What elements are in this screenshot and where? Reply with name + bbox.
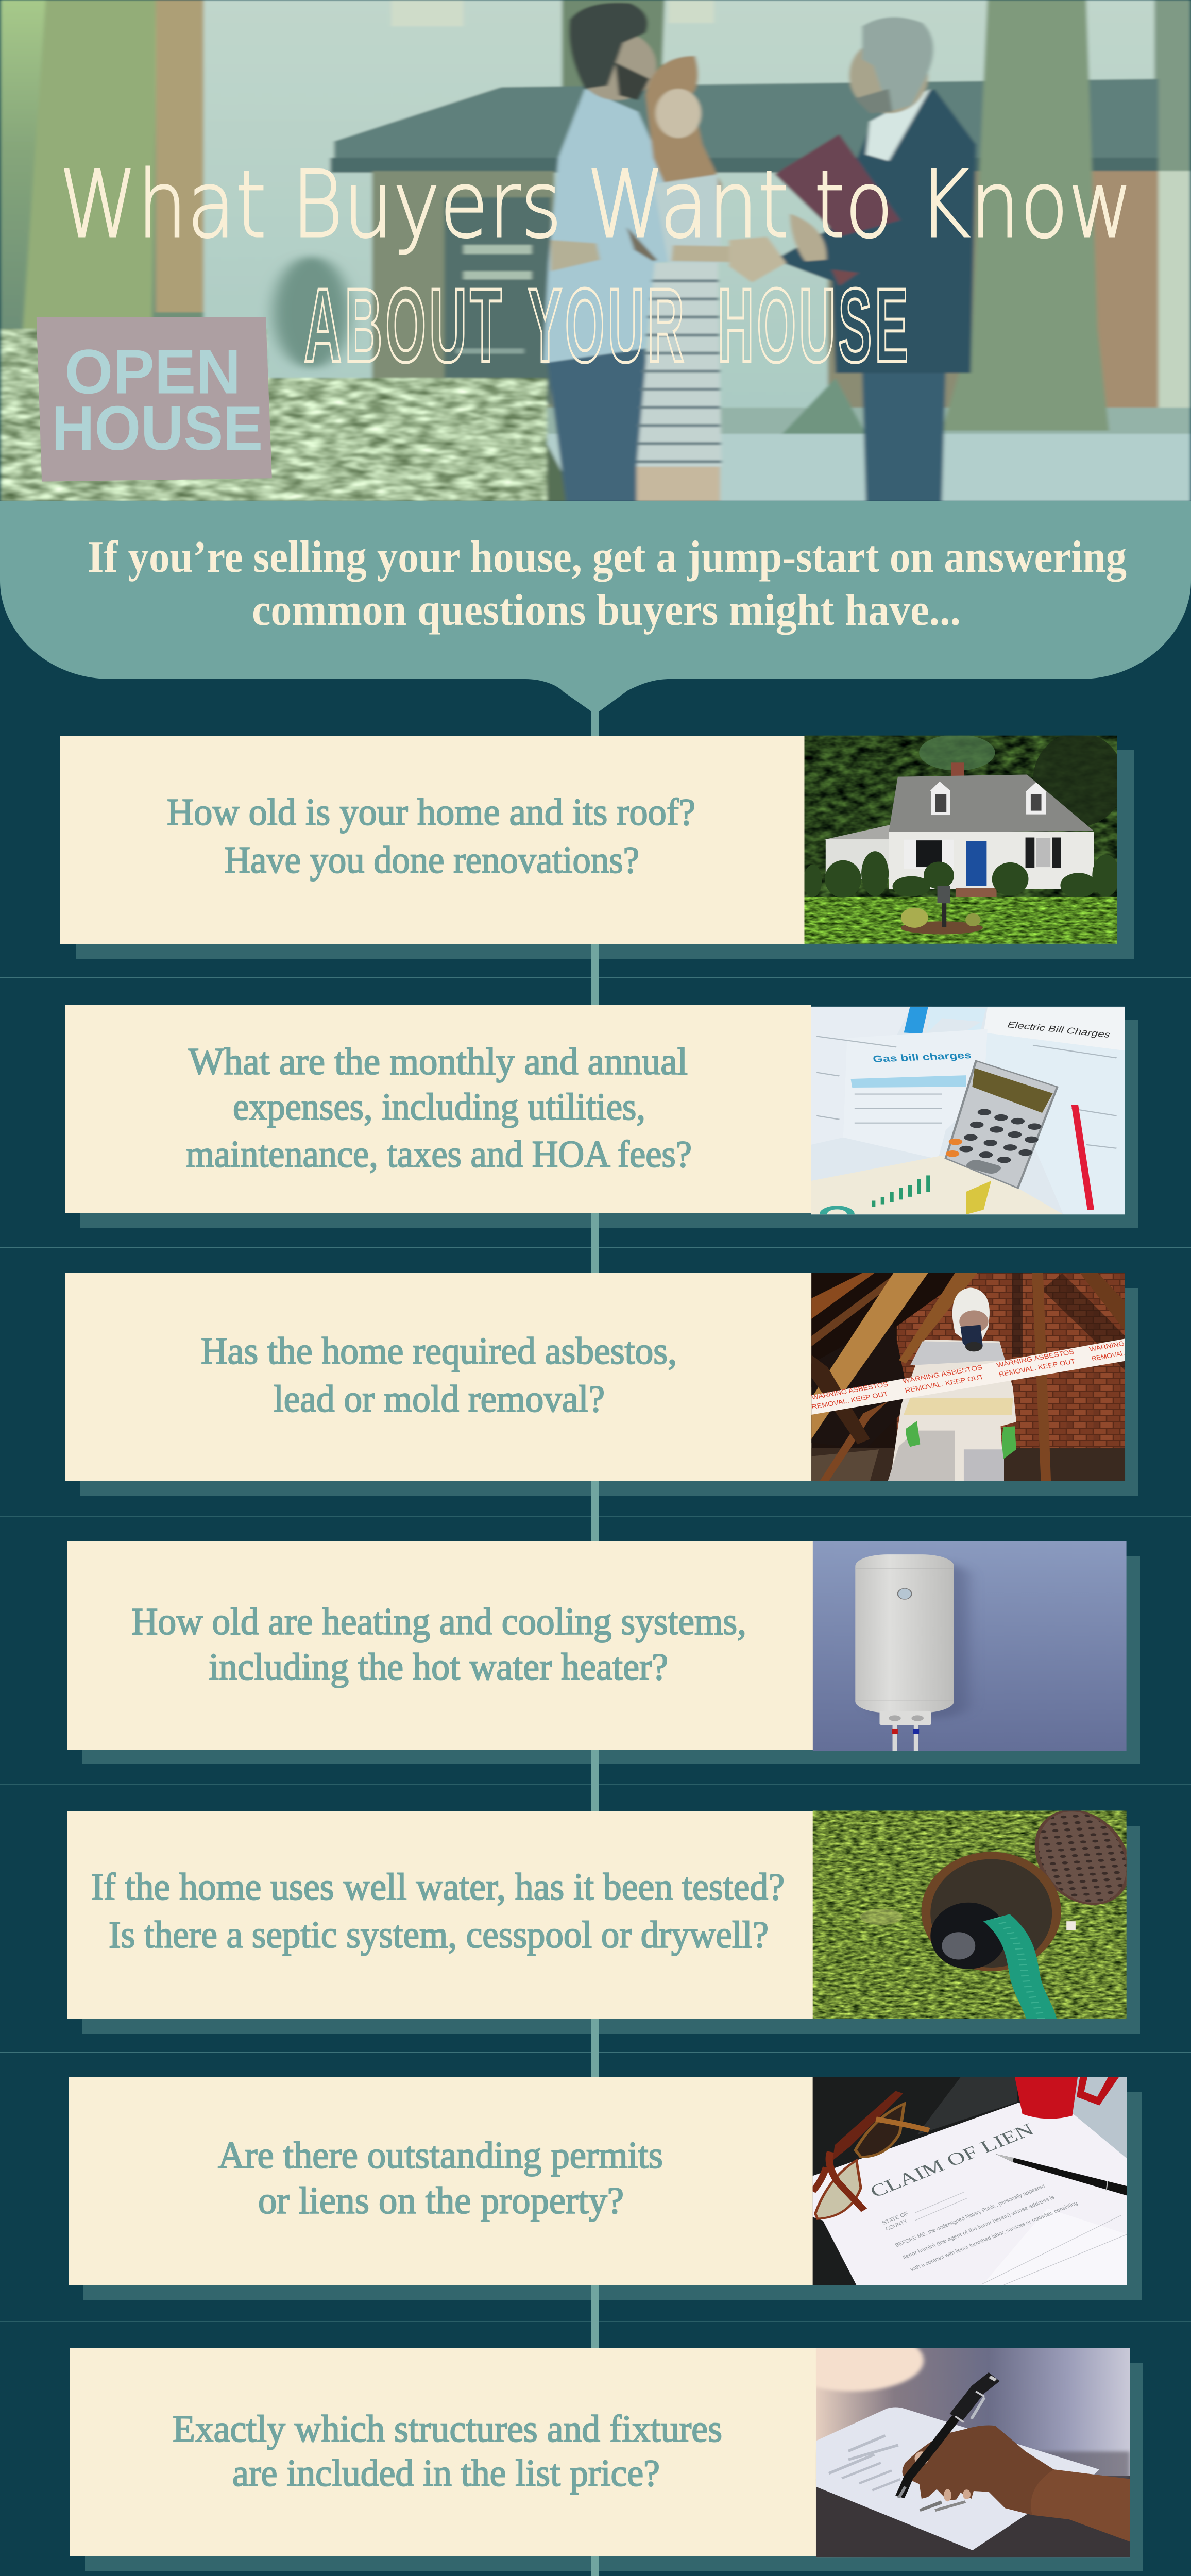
question 7 text: Exactly which structures and fixtures [173,2408,722,2450]
subtitle: About Your House: YOUR [528,267,687,384]
open house sign: OPEN [64,337,241,407]
photo: asbestos worker in attic: WARNING ASBESTOS [996,1348,1075,1369]
photo: asbestos worker in attic: REMOVAL. KEEP OUT [811,1391,889,1411]
question 2 text: expenses, including utilities, [233,1086,645,1128]
photo: claim of lien document with glasses, pen and red mug: with a contract with lienor furnished labor, services or materials consisting [909,2200,1079,2273]
photo: water heater on blue wall [813,1541,1127,1751]
photo: hand writing on checklist with pen [780,2330,1130,2557]
question 1 text: How old is your home and its roof? [167,791,695,834]
question 6 text: or liens on the property? [258,2180,624,2222]
question 5 text [91,1866,785,1956]
photo: claim of lien document with glasses, pen and red mug: BEFORE ME, the undersigned Notary Public, personally appeared [894,2183,1046,2248]
photo: asbestos worker in attic: WARNING [1088,1340,1126,1353]
photo: asbestos worker in attic: REMOVAL. KEEP OUT [904,1374,984,1395]
photo: asbestos worker in attic: WARNING ASBESTOS [811,1381,889,1401]
photo: septic tank with green hose [813,1808,1140,2022]
question 2 text: maintenance, taxes and HOA fees? [186,1133,692,1176]
banner text: If you’re selling your house, get a jump-start on answering [88,532,1127,582]
question 4 text: How old are heating and cooling systems, [131,1601,746,1643]
subtitle: About Your House: ABOUT [304,267,505,384]
text: HOUSE [718,267,911,384]
photo: claim of lien document with glasses, pen and red mug [813,2077,1127,2285]
photo: claim of lien document with glasses, pen and red mug: lienor herein) (the agent of the lienor herein) whose address is [902,2195,1056,2260]
question 5 text: If the home uses well water, has it been tested? [91,1866,785,1908]
man in dark suit with folder [862,371,946,501]
document text: CLAIM OF LIEN [866,2120,1037,2201]
photo: calculator on utility bills: Gas bill charges [872,1050,972,1064]
question 5 text: Is there a septic system, cesspool or drywell? [109,1914,769,1956]
question 7 text [173,2408,722,2495]
glasses [813,2091,929,2219]
question 4 text: including the hot water heater? [209,1646,668,1688]
question 4 text [131,1601,746,1688]
question 3 text: Has the home required asbestos, [201,1330,677,1372]
photo: calculator on utility bills [811,1005,1125,1221]
hero photo: couple shaking hands with agent at open house [0,0,1191,501]
photo: claim of lien document with glasses, pen and red mug: STATE OF [881,2211,910,2226]
card 7: structures and fixtures [70,2330,1130,2557]
question 3 text [201,1330,677,1420]
banner text: common questions buyers might have... [252,585,961,635]
photo: white cape house with blue door [804,733,1124,944]
photo: asbestos worker in attic: REMOVAL [1091,1350,1126,1363]
photo: claim of lien document with glasses, pen and red mug: COUNTY [884,2218,909,2232]
photo: asbestos worker in attic: REMOVAL. KEEP OUT [998,1358,1076,1378]
card 6: permits and liens [69,2077,1127,2285]
question 1 text [167,791,695,882]
open house sign [37,317,272,482]
woman in striped dress [637,263,722,467]
photo: asbestos worker in attic: WARNING ASBESTOS [902,1364,983,1385]
subtitle: About Your House [304,267,911,384]
hero photo: couple shaking hands with agent at open house: HOUSE [52,393,263,463]
question 7 text: are included in the list price? [232,2452,660,2495]
card 4: heating and cooling [67,1541,1127,1751]
banner text [88,532,1127,635]
vertical connector line [591,706,599,2576]
card 3: asbestos [65,1273,1126,1481]
question 2 text: What are the monthly and annual [189,1041,688,1083]
question 2 text [186,1041,692,1176]
card 5: well water and septic [67,1808,1140,2022]
card 2: expenses [65,1005,1125,1221]
card 1: age of home [60,733,1124,944]
question 6 text: Are there outstanding permits [218,2134,663,2177]
photo: calculator on utility bills: Electric Bill Charges [1006,1020,1112,1040]
intro banner [0,501,1191,711]
question 1 text: Have you done renovations? [224,839,639,882]
question 3 text: lead or mold removal? [274,1378,605,1420]
man in blue shirt [547,348,650,501]
question 6 text [218,2134,663,2222]
photo: asbestos worker in attic [811,1273,1126,1481]
card shadows [76,750,1143,2571]
dividers [0,977,1191,2576]
